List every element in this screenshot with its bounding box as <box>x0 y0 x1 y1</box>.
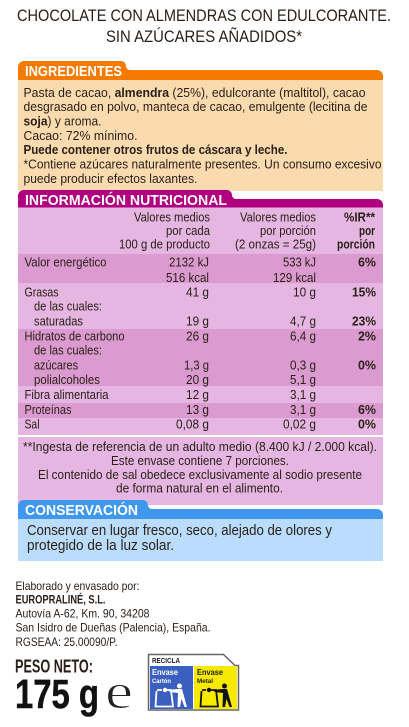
conservación heading <box>18 500 383 519</box>
table header: 100 g de producto <box>119 236 210 252</box>
conservación text: Conservar en lugar fresco, seco, alejado de olores y <box>27 523 333 539</box>
manufacturer address: RGSEAA: 25.00090/P. <box>16 635 118 649</box>
ingredientes text: *Contiene azúcares naturalmente presentes. Un consumo excesivo <box>24 156 382 172</box>
panel: ingredientes <box>18 61 383 191</box>
ingredientes text: Pasta de cacao, almendra (25%), edulcorante (maltitol), cacao <box>24 85 366 100</box>
percent IR values <box>352 254 376 432</box>
percent IR values: 6% <box>358 254 376 270</box>
manufacturer address: Autovía A-62, Km. 90, 34208 <box>16 606 150 620</box>
values per portion <box>273 254 316 432</box>
ingredientes text: puede producir efectos laxantes. <box>24 171 198 186</box>
values per 100 g: 0,08 g <box>176 416 209 432</box>
manufacturer address: San Isidro de Dueñas (Palencia), España. <box>16 620 210 634</box>
net weight: PESO NETO: <box>15 656 93 676</box>
row labels: Valor energético <box>24 254 106 270</box>
table header: Valores medios <box>240 210 316 224</box>
panel: notas <box>18 437 383 505</box>
nutricional heading: INFORMACIÓN NUTRICIONAL <box>25 191 227 209</box>
values per portion: 6,4 g <box>290 328 316 344</box>
blue panel: envase cartón <box>152 667 187 707</box>
values per portion: 533 kJ <box>283 254 316 270</box>
values per portion: 0,3 g <box>290 358 316 372</box>
row labels: polialcoholes <box>34 372 100 387</box>
table header: Valores medios <box>134 210 210 224</box>
panel: notas: Este envase contiene 7 porciones. <box>111 453 289 468</box>
net weight: 175 g <box>15 671 99 717</box>
table header: por porción <box>260 223 316 238</box>
manufacturer address: EUROPRALINÉ, S.L. <box>16 592 106 606</box>
ingredientes text: Cacao: 72% mínimo. <box>24 128 138 143</box>
row labels: saturadas <box>34 314 83 328</box>
values per portion: 0,02 g <box>283 416 316 432</box>
values per portion: 5,1 g <box>290 372 316 387</box>
row labels: Grasas <box>24 284 59 300</box>
ingredientes heading: INGREDIENTES <box>25 64 122 80</box>
percent IR values: 15% <box>352 284 376 300</box>
values per 100 g: 1,3 g <box>184 358 209 372</box>
manufacturer address <box>16 579 210 649</box>
ingredientes heading <box>18 61 383 80</box>
row labels: Sal <box>24 416 40 432</box>
row labels: Proteínas <box>24 402 72 417</box>
values per portion: 4,7 g <box>290 314 316 328</box>
ingredientes text: soja) y aroma. <box>24 114 102 128</box>
panel: información nutricional <box>18 190 383 435</box>
values per portion: 3,1 g <box>290 387 316 402</box>
icon: recycling label <box>148 654 238 710</box>
blue panel: envase cartón: Envase <box>152 667 178 677</box>
icon: estimated sign e: e <box>105 663 133 719</box>
values per 100 g: 516 kcal <box>166 270 209 285</box>
values per 100 g: 13 g <box>186 402 209 417</box>
values per portion: 129 kcal <box>273 270 316 285</box>
blue panel: envase cartón: Cartón <box>152 678 171 685</box>
percent IR values: 2% <box>358 328 376 344</box>
panel: conservación <box>18 500 383 561</box>
table header: por cada <box>166 223 211 238</box>
values per 100 g: 20 g <box>186 372 209 387</box>
yellow panel: envase metal: Metal <box>197 678 213 685</box>
table header: porción <box>337 236 375 252</box>
ingredientes text <box>24 85 382 186</box>
manufacturer address: Elaborado y envasado por: <box>16 579 140 593</box>
title: SIN AZÚCARES AÑADIDOS* <box>106 26 303 46</box>
percent IR values: 6% <box>358 402 376 417</box>
ingredientes text: desgrasado en polvo, manteca de cacao, emulgente (lecitina de <box>24 99 368 114</box>
conservación text: protegido de la luz solar. <box>27 538 174 554</box>
row labels: Fibra alimentaria <box>24 387 109 402</box>
values per 100 g <box>166 254 209 432</box>
table header: por <box>359 223 375 238</box>
conservación text <box>27 523 333 554</box>
values per 100 g: 26 g <box>186 328 209 344</box>
row labels <box>24 254 124 432</box>
panel: notas: El contenido de sal obedece exclusivamente al sodio presente <box>38 467 362 482</box>
conservación heading: CONSERVACIÓN <box>25 501 138 519</box>
values per 100 g: 12 g <box>186 387 209 402</box>
values per 100 g: 19 g <box>186 314 209 328</box>
net weight <box>15 656 99 717</box>
row labels: azúcares <box>34 358 78 372</box>
row labels: de las cuales: <box>34 342 102 358</box>
yellow panel: envase metal <box>197 667 232 707</box>
panel: notas: de forma natural en el alimento. <box>116 480 283 496</box>
row labels: de las cuales: <box>34 298 102 314</box>
table header: (2 onzas = 25g) <box>235 236 316 252</box>
table header <box>119 210 376 252</box>
values per 100 g: 2132 kJ <box>169 254 209 270</box>
table header: %IR** <box>344 210 376 224</box>
percent IR values: 0% <box>358 416 376 432</box>
panel: notas: **Ingesta de referencia de un adulto medio (8.400 kJ / 2.000 kcal). <box>23 439 377 454</box>
yellow panel: envase metal: Envase <box>197 667 223 677</box>
percent IR values: 0% <box>358 358 376 372</box>
values per 100 g: 41 g <box>186 284 209 300</box>
nutricional heading <box>18 190 383 209</box>
ingredientes text: Puede contener otros frutos de cáscara y leche. <box>24 142 288 157</box>
icon: recycling label: RECICLA <box>152 656 180 665</box>
percent IR values: 23% <box>352 314 376 328</box>
values per portion: 3,1 g <box>290 402 316 417</box>
row labels: Hidratos de carbono <box>24 328 124 344</box>
title <box>17 7 391 46</box>
values per portion: 10 g <box>293 284 316 300</box>
